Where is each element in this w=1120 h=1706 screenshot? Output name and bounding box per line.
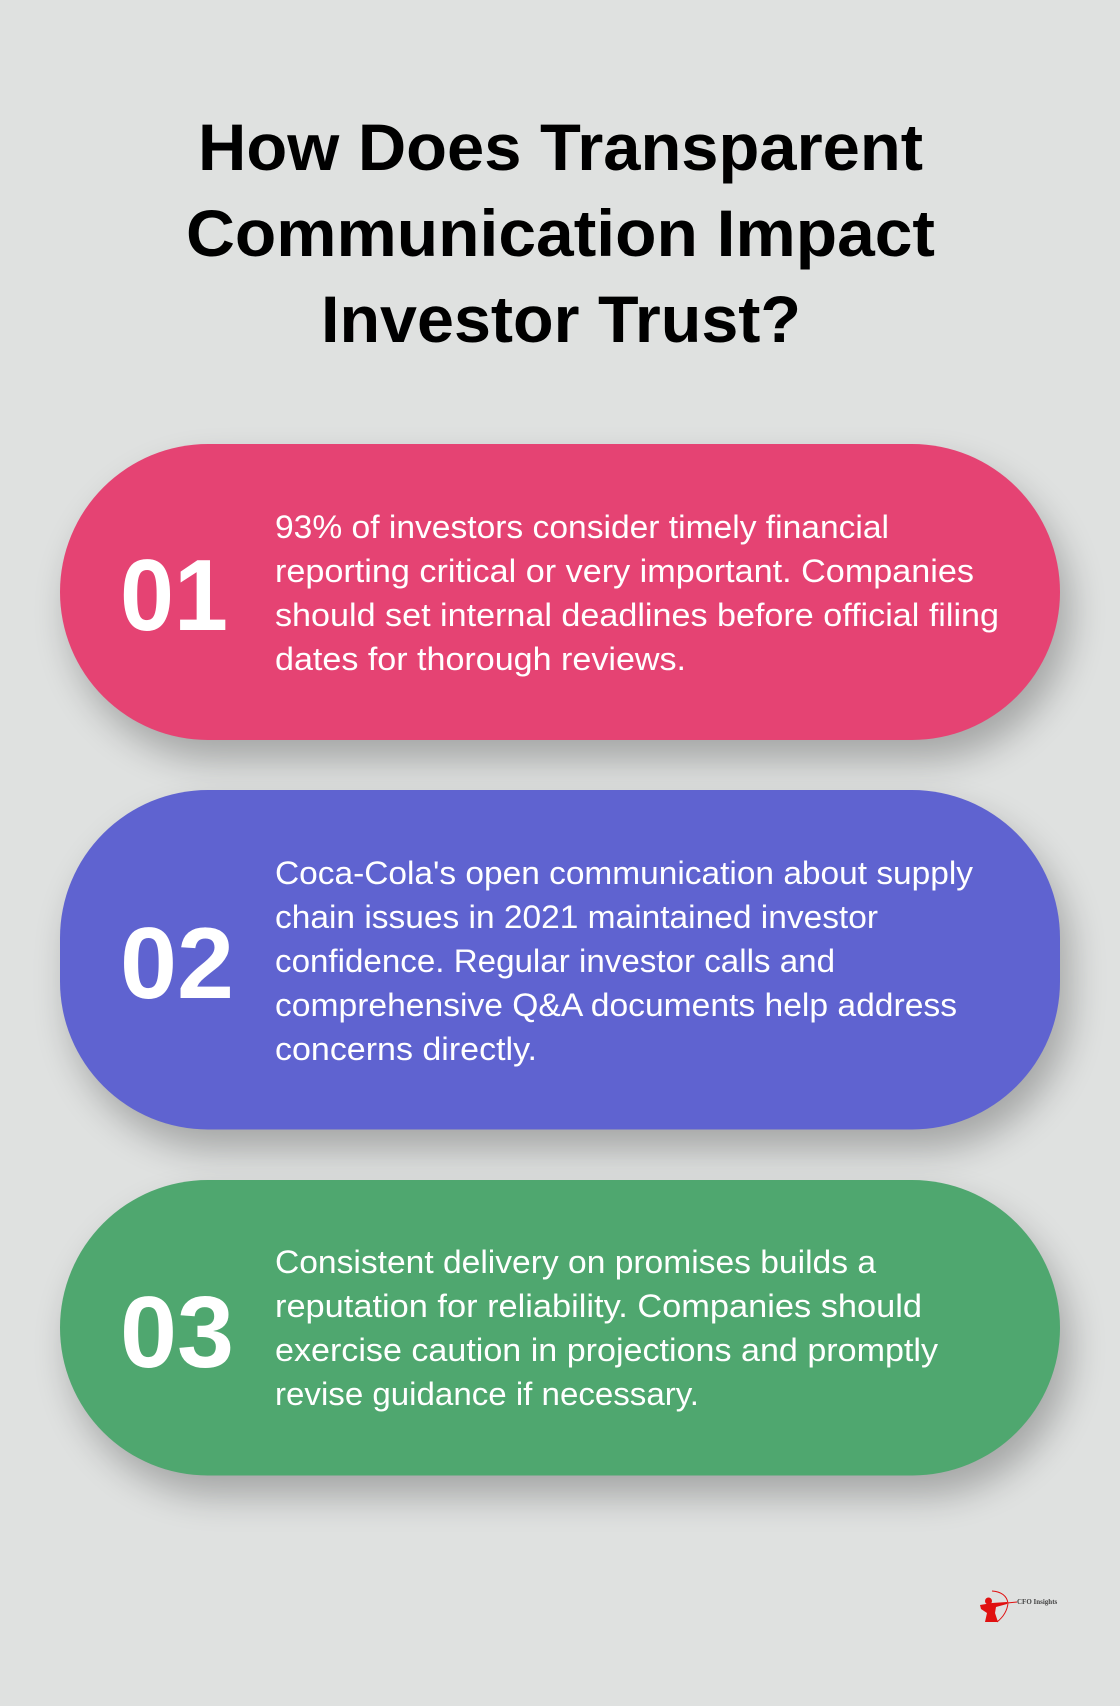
title: Investor Trust? (321, 282, 801, 356)
text block 02: comprehensive Q&A documents help address (275, 987, 957, 1023)
number 01: 01 (120, 540, 228, 652)
panel: card 03 (60, 1180, 1070, 1496)
icon: red archer (980, 1591, 1017, 1622)
number 02: 02 (120, 908, 234, 1020)
text block 02: Coca-Cola's open communication about supply (275, 855, 973, 891)
text block 02: concerns directly. (275, 1031, 537, 1067)
text block 02 (275, 855, 973, 1067)
text block 02: chain issues in 2021 maintained investor (275, 899, 878, 935)
text block 01: dates for thorough reviews. (275, 641, 686, 677)
panel: card 02 (60, 790, 1070, 1150)
text block 01: reporting critical or very important. Companies (275, 553, 974, 589)
text block 01: should set internal deadlines before official filing (275, 597, 999, 633)
logo: CFO Insights (980, 1591, 1058, 1622)
text block 03: reputation for reliability. Companies should (275, 1288, 922, 1324)
title (186, 110, 935, 356)
title: Communication Impact (186, 196, 935, 270)
text block 03: exercise caution in projections and promptly (275, 1332, 938, 1368)
text block 01: 93% of investors consider timely financial (275, 509, 889, 545)
logo text: CFO Insights (1017, 1598, 1058, 1606)
panel: card 01 (60, 444, 1070, 760)
text block 03 (275, 1244, 938, 1412)
text block 02: confidence. Regular investor calls and (275, 943, 835, 979)
number 03: 03 (120, 1277, 234, 1389)
text block 03: revise guidance if necessary. (275, 1376, 699, 1412)
title: How Does Transparent (198, 110, 923, 184)
text block 01 (275, 509, 999, 677)
text block 03: Consistent delivery on promises builds a (275, 1244, 876, 1280)
